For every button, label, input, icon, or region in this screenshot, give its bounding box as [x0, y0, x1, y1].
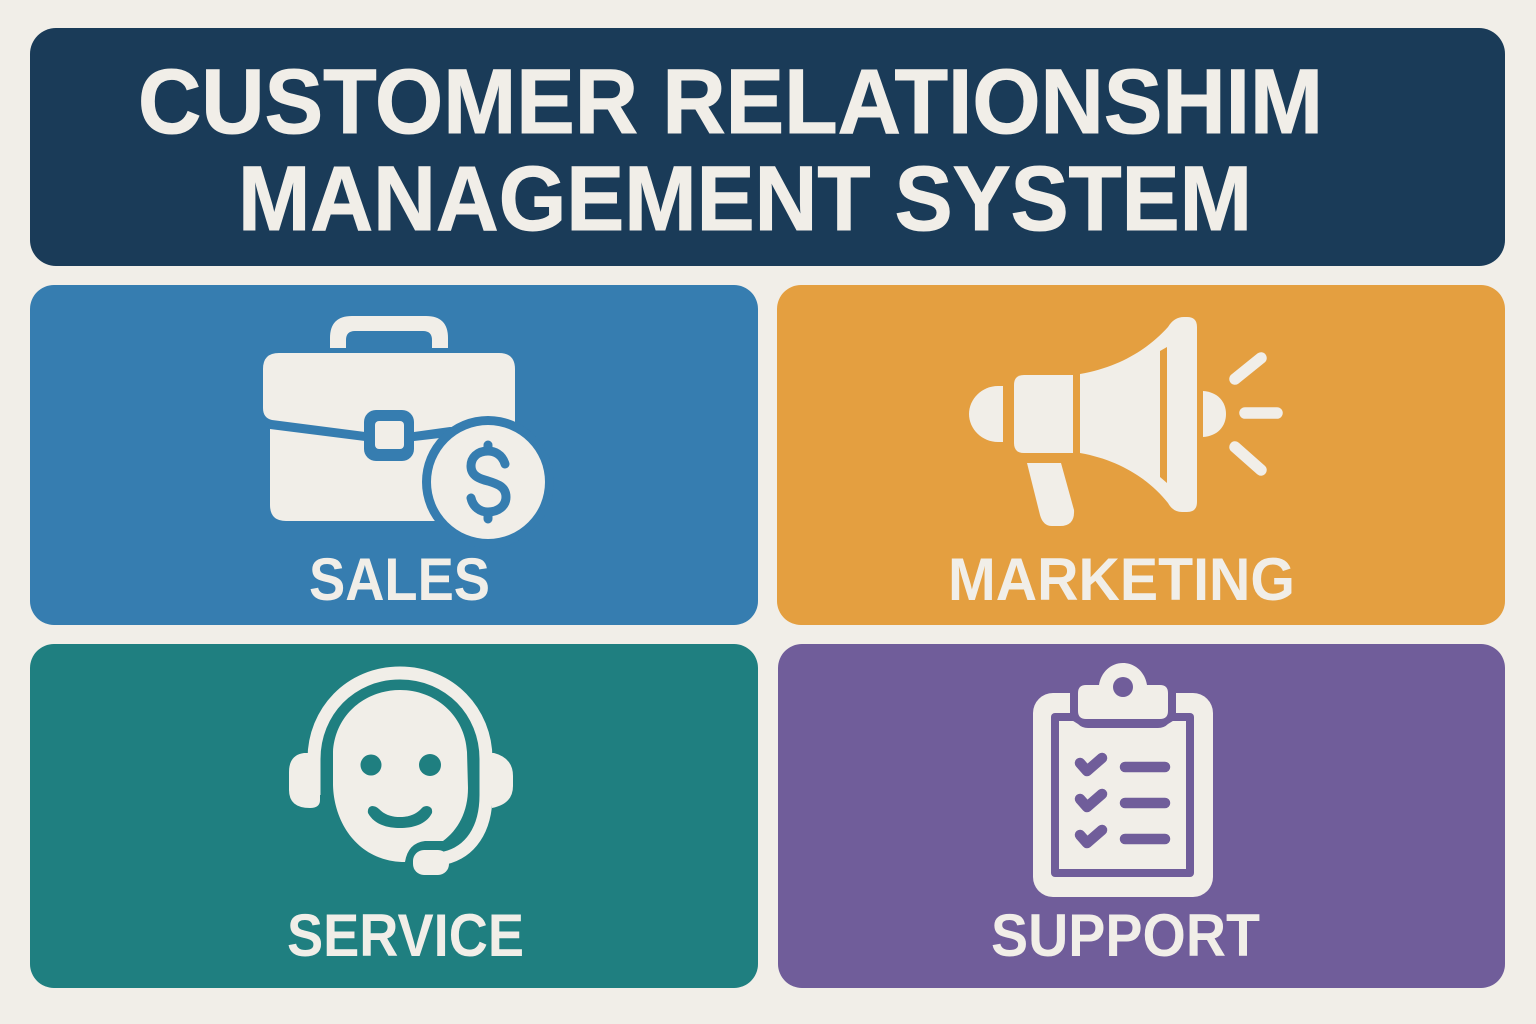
panel: marketing — [777, 285, 1505, 625]
title line 2: MANAGEMENT SYSTEM — [238, 148, 1252, 250]
icon: briefcase with dollar coin — [263, 316, 554, 548]
label: service: SERVICE — [287, 902, 524, 969]
panel: sales — [30, 285, 758, 625]
label: support: SUPPORT — [991, 902, 1260, 969]
label: marketing: MARKETING — [948, 546, 1295, 613]
icon: support agent with headset — [289, 673, 513, 875]
label: sales: SALES — [309, 546, 490, 613]
icon: megaphone — [969, 317, 1277, 526]
panel: title banner — [30, 28, 1505, 266]
title line 1: CUSTOMER RELATIONSHIM — [138, 51, 1323, 153]
icon: clipboard checklist — [1033, 663, 1213, 897]
panel: service — [30, 644, 758, 988]
panel: support — [778, 644, 1505, 988]
